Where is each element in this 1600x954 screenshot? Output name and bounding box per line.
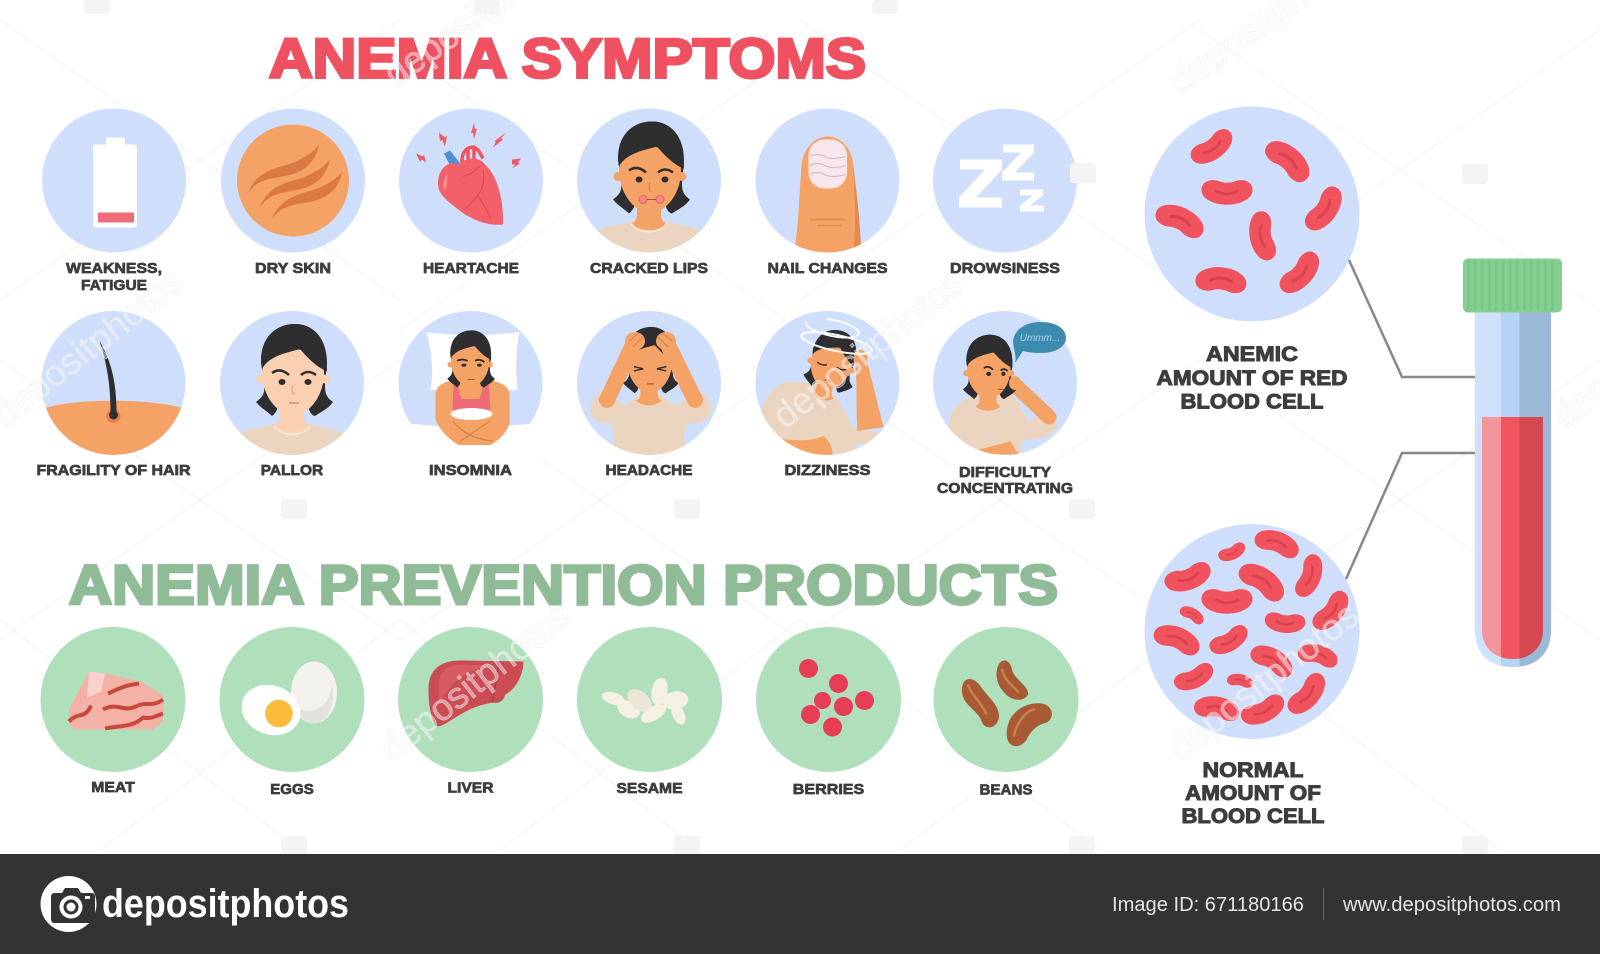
speech bubble: ummm: Ummm... (1020, 333, 1060, 344)
icon: hair follicle (42, 341, 186, 455)
stock watermarks: depositphotos (1160, 594, 1366, 768)
symptom: weakness, fatigue (42, 108, 186, 294)
product: eggs: EGGS (270, 781, 314, 798)
footer bar (0, 854, 1600, 954)
symptom: headache: HEADACHE (606, 462, 692, 479)
symptom: drowsiness: DROWSINESS (950, 260, 1060, 277)
symptom: cracked lips (577, 108, 721, 277)
stock watermarks: depositphotos (765, 262, 971, 436)
symptom: heartache: HEARTACHE (423, 260, 519, 277)
anemic blood cells panel (1144, 106, 1360, 322)
product: berries: BERRIES (793, 781, 864, 798)
label: normal amount of blood cell (1182, 759, 1325, 828)
icon: beans (962, 660, 1052, 746)
symptom: insomnia (398, 311, 544, 479)
image id: Image ID: 671180166 (1112, 894, 1304, 916)
leader line: normal (1346, 453, 1476, 579)
product: liver (398, 627, 543, 796)
label: normal amount of blood cell: AMOUNT OF (1185, 782, 1321, 805)
label: normal amount of blood cell: NORMAL (1202, 759, 1304, 782)
symptom: fragility of hair: FRAGILITY OF HAIR (36, 462, 191, 479)
website: www.depositphotos.com (1342, 894, 1561, 916)
symptom: cracked lips: CRACKED LIPS (590, 260, 708, 277)
symptom: insomnia: INSOMNIA (429, 462, 512, 479)
label: anemic amount of red blood cell: ANEMIC (1206, 343, 1298, 366)
icon: low battery (93, 138, 137, 228)
title: anemia prevention products: ANEMIA PREVENTION PRODUCTS (69, 553, 1058, 616)
label: normal amount of blood cell: BLOOD CELL (1182, 805, 1325, 828)
label: anemic amount of red blood cell: BLOOD CELL (1180, 390, 1324, 414)
symptom: weakness, fatigue: FATIGUE (81, 277, 147, 294)
stock watermarks: depositphotos (372, 594, 578, 768)
symptom: drowsiness (933, 108, 1077, 277)
icon: berries (799, 659, 874, 736)
symptom: difficulty concentrating (933, 311, 1077, 497)
product: beans: BEANS (980, 782, 1032, 798)
icon: thinking woman (947, 322, 1066, 455)
symptom: heartache (399, 108, 543, 277)
icon: heart (416, 122, 521, 225)
icon: dizzy woman (756, 315, 884, 455)
title: anemia symptoms: ANEMIA SYMPTOMS (269, 26, 866, 90)
product: beans (934, 627, 1078, 798)
icon: zzz (959, 144, 1044, 212)
leader line: anemic (1349, 260, 1476, 377)
icon: pale woman (240, 324, 344, 455)
icon: finger with ridged nail (794, 136, 862, 252)
normal blood cells panel (1144, 524, 1360, 739)
icon: liver (428, 660, 524, 726)
symptom: difficulty concentrating: DIFFICULTY (959, 464, 1051, 481)
symptom: weakness, fatigue: WEAKNESS, (66, 260, 162, 277)
symptom: nail changes (756, 108, 900, 277)
product: berries (756, 627, 901, 798)
product: meat (40, 627, 186, 796)
product: sesame (577, 627, 722, 797)
product: sesame: SESAME (616, 780, 682, 797)
icon: woman lying awake (398, 330, 544, 457)
icon: woman with cracked lips (598, 122, 700, 252)
symptom: dizziness: DIZZINESS (784, 462, 870, 479)
icon: meat (69, 672, 163, 730)
symptom: pallor (220, 311, 364, 479)
footer separator (1323, 888, 1324, 920)
label: anemic amount of red blood cell (1156, 343, 1348, 414)
label: anemic amount of red blood cell: AMOUNT OF RED (1156, 367, 1348, 390)
symptom: nail changes: NAIL CHANGES (768, 260, 888, 277)
icon: eggs (234, 662, 337, 743)
symptom: dry skin: DRY SKIN (255, 260, 331, 277)
product: eggs (220, 627, 364, 798)
icon: sesame seeds (600, 676, 690, 727)
product: meat: MEAT (91, 779, 135, 796)
test tube (1463, 258, 1562, 672)
product: liver: LIVER (448, 780, 494, 796)
symptom: difficulty concentrating: CONCENTRATING (937, 480, 1073, 497)
symptom: dizziness (756, 311, 900, 479)
symptom: fragility of hair (36, 311, 191, 479)
symptom: dry skin (221, 108, 365, 277)
icon: woman holding head (591, 327, 711, 455)
symptom: headache (577, 311, 721, 479)
footer logo icon (40, 876, 96, 932)
symptom: pallor: PALLOR (261, 462, 323, 479)
footer logo text: depositphotos (102, 882, 349, 926)
icon: skin patch (237, 124, 349, 236)
